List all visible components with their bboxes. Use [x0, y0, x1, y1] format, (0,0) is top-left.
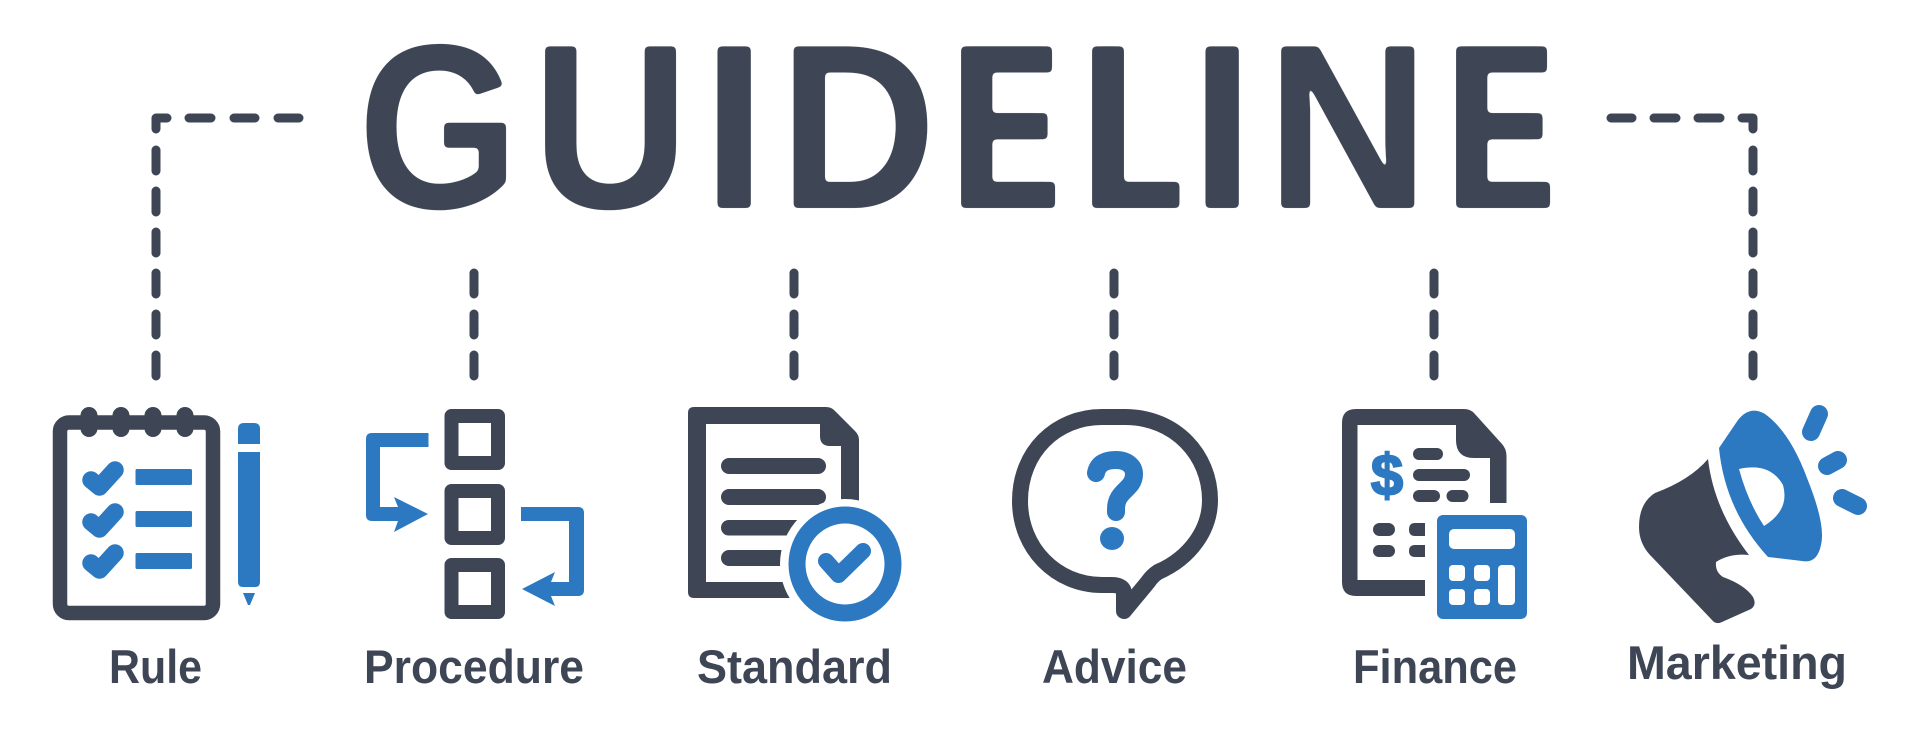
speech bubble [1020, 417, 1210, 611]
title: I [702, 0, 767, 258]
icon: marketing megaphone [1639, 411, 1858, 623]
procedure boxes [452, 416, 498, 612]
icon: procedure flow steps [366, 416, 584, 612]
connector: top right dashed elbow to Marketing [1611, 118, 1753, 376]
checklist ticks [91, 470, 115, 570]
title: L [1082, 0, 1174, 258]
title: G [358, 0, 518, 258]
label: Marketing: Marketing [1627, 636, 1847, 689]
finance document [1342, 409, 1506, 596]
label: Rule: Rule [109, 640, 202, 693]
title: U [532, 0, 690, 258]
pencil [238, 423, 260, 605]
title: D [779, 0, 936, 258]
megaphone handle and horn [1639, 459, 1755, 623]
connector: dashed line to Procedure [470, 273, 478, 376]
connector: top left dashed elbow to Rule [156, 118, 299, 376]
icon: finance document and calculator [1342, 409, 1527, 619]
flow arrow: left [366, 433, 428, 532]
calculator body [1437, 515, 1527, 619]
label: Advice: Advice [1042, 640, 1187, 693]
icon: standard document with approved badge [688, 407, 910, 629]
question mark dot [1100, 527, 1124, 550]
notepad spiral rings [80, 407, 194, 437]
title: N [1266, 0, 1429, 258]
title [358, 0, 1550, 258]
title: E [951, 0, 1051, 258]
calculator screen and keys [1449, 529, 1515, 605]
document lines [1373, 448, 1470, 557]
title: E [1446, 0, 1546, 258]
sound rays [1811, 414, 1858, 506]
megaphone bell [1719, 411, 1822, 561]
icon: advice speech bubble [1020, 417, 1210, 611]
label: Finance: Finance [1353, 640, 1517, 693]
checklist bars [136, 469, 192, 569]
title: I [1190, 0, 1254, 258]
notepad frame [60, 422, 213, 613]
label: Standard: Standard [697, 640, 892, 693]
flow arrow: right [521, 507, 584, 606]
document text lines [721, 458, 826, 566]
label: Procedure: Procedure [364, 640, 584, 693]
connector: dashed line to Advice [1110, 273, 1118, 376]
badge ring [797, 515, 893, 613]
question mark hook [1096, 460, 1134, 512]
connector: dashed line to Finance [1430, 273, 1438, 376]
megaphone opening [1739, 467, 1784, 526]
badge tick [826, 551, 863, 575]
connector: dashed line to Standard [790, 273, 798, 376]
document [688, 407, 859, 598]
dollar sign: $ [1371, 443, 1403, 508]
badge gap [780, 499, 910, 629]
icon: rule notepad with checklist and pencil [60, 407, 260, 613]
